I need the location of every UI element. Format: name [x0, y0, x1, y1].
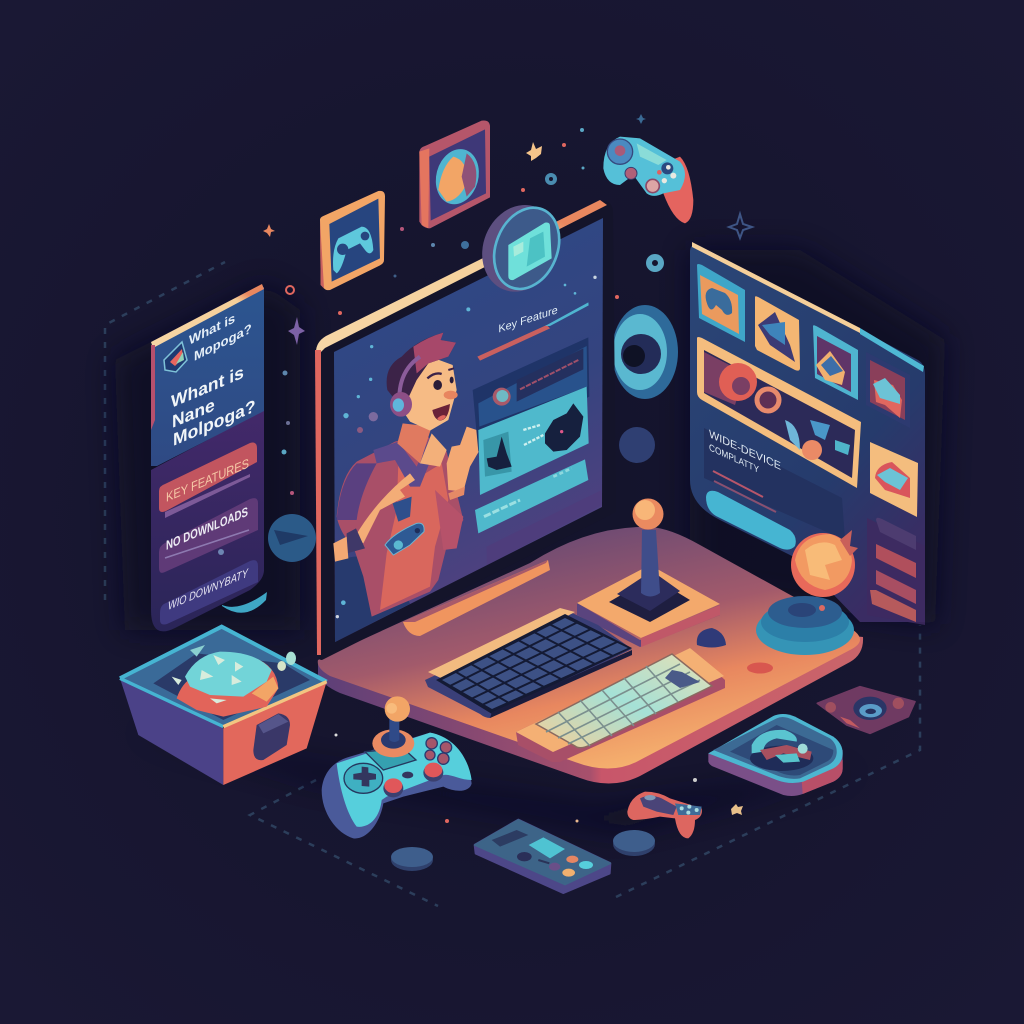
pointing hand and arm — [355, 473, 415, 543]
key smudge — [665, 670, 700, 688]
monitor top rim — [316, 200, 607, 352]
tray base — [708, 750, 843, 796]
wave accent — [222, 592, 267, 613]
floating icon: controller tile — [320, 191, 385, 290]
box right side — [223, 682, 327, 785]
cyan button — [706, 491, 796, 550]
speaker eye — [612, 305, 678, 399]
joystick plate — [577, 603, 720, 647]
text: small heading line 2: Mopoga? — [194, 321, 252, 364]
box rim — [120, 627, 327, 682]
joystick ball — [385, 696, 410, 722]
joystick stick — [641, 530, 660, 596]
floating controller top right — [603, 137, 693, 223]
screen sparks — [336, 276, 597, 618]
red thumb button left — [383, 779, 403, 797]
controller red grip — [663, 157, 693, 223]
button: community — [160, 560, 258, 624]
hair — [387, 333, 456, 400]
shirt body — [337, 433, 463, 617]
treasure box — [120, 627, 327, 785]
small ring ornaments — [286, 175, 661, 294]
tray ring — [750, 746, 813, 771]
character — [333, 333, 482, 617]
UI panel: game card — [478, 387, 589, 495]
round tray — [708, 714, 843, 796]
text block: wide-device — [704, 428, 845, 540]
raised hand — [447, 427, 482, 492]
tile: controller — [697, 264, 745, 342]
dark keyboard — [425, 608, 632, 718]
screen content in zoom coords — [333, 276, 602, 618]
lower panel body — [151, 410, 264, 631]
UI panel: action bar — [475, 459, 588, 533]
text block: wide-device: COMPLATTY — [709, 442, 759, 476]
monitor stand — [403, 560, 550, 636]
button: community: WIO DOWNYBATY — [168, 566, 249, 613]
tray top — [708, 714, 843, 783]
controller top plate — [637, 143, 667, 165]
joystick ball — [632, 498, 664, 530]
tile: abstract orange — [755, 296, 800, 371]
monitor stand top — [403, 560, 548, 622]
monitor left edge — [315, 350, 321, 655]
text block: wide-device: WIDE-DEVICE — [709, 428, 781, 473]
nose — [444, 391, 458, 399]
joystick ring — [372, 729, 414, 757]
tag icon — [393, 497, 412, 522]
front controller — [322, 696, 472, 838]
soft dark haze behind scene — [115, 250, 945, 830]
ear cup — [390, 392, 412, 417]
text: main heading line 2: Nane — [172, 394, 215, 432]
d-pad — [353, 767, 376, 787]
small disc right — [613, 830, 655, 856]
monitor screen — [334, 218, 603, 642]
controller top — [337, 733, 472, 827]
box latch — [253, 713, 290, 760]
eye — [433, 380, 442, 390]
right panel body — [690, 245, 925, 622]
small controller — [627, 792, 702, 838]
text: main heading line 3: Molpoga? — [173, 395, 256, 450]
small orb — [619, 427, 655, 463]
treasure pile — [177, 655, 278, 717]
floating icon: game art tile — [419, 120, 490, 228]
button: key features — [159, 443, 257, 518]
remote handset — [475, 820, 610, 893]
face — [397, 357, 457, 431]
left ornament orb — [268, 514, 316, 562]
mouth — [432, 404, 450, 421]
screen dark wave lower left — [335, 556, 410, 642]
floating icon: orb screen — [469, 193, 571, 303]
desk top surface — [318, 527, 860, 769]
hoodie sleeve dark — [337, 463, 377, 520]
red thumb button right — [423, 764, 443, 782]
text: small heading: What is — [189, 310, 235, 348]
text: main heading line 1: Whant is — [171, 361, 244, 412]
tile: controller orange — [870, 442, 918, 517]
tile: large game art — [697, 337, 861, 488]
headphone band — [399, 357, 420, 397]
desk pebbles — [697, 628, 773, 674]
heading underline bars — [477, 325, 550, 361]
brows — [427, 373, 442, 378]
joystick on desk — [577, 498, 720, 647]
tile: controller purple — [866, 352, 910, 428]
light keys — [536, 654, 712, 748]
box opening — [120, 627, 327, 727]
isometric floor dashed outline — [105, 262, 920, 906]
face buttons — [426, 738, 437, 749]
right panel top rim — [692, 242, 862, 334]
tile: box — [813, 325, 858, 400]
icon: logo badge — [164, 342, 187, 372]
shirt highlight — [380, 463, 448, 610]
panel: wide-device compatibility — [690, 242, 925, 625]
stars and sparks — [263, 114, 752, 823]
controller body — [603, 137, 685, 196]
monitor — [315, 200, 616, 660]
light keyboard tray — [516, 648, 725, 762]
controller body — [322, 733, 472, 838]
wrist band — [448, 487, 465, 500]
joystick stem — [389, 715, 399, 742]
button: no downloads — [159, 498, 258, 573]
centre plate — [365, 748, 416, 770]
blue dome — [756, 596, 854, 655]
blue header card — [151, 287, 264, 466]
game card — [817, 687, 915, 733]
left stick — [607, 139, 633, 164]
box inner shade — [153, 653, 310, 720]
lower stick — [625, 167, 637, 179]
right menu list — [867, 518, 925, 625]
panel: what is Mopoga — [151, 284, 267, 631]
face buttons — [661, 162, 673, 174]
small disc left — [391, 847, 433, 871]
small select — [402, 772, 413, 778]
tray inner — [713, 717, 837, 779]
orange fireball — [791, 530, 858, 597]
neck — [397, 423, 432, 463]
desk — [318, 527, 863, 784]
UI panel: profile row — [473, 337, 589, 452]
purple lower right region — [487, 490, 602, 565]
light keyboard — [516, 648, 725, 762]
joystick base — [609, 577, 690, 622]
button: key features: KEY FEATURES — [166, 456, 249, 505]
header card rim — [151, 284, 264, 348]
star ornament — [526, 142, 542, 161]
shirt controller print — [385, 523, 424, 555]
button: no downloads: NO DOWNLOADS — [166, 504, 248, 553]
collar — [373, 437, 433, 487]
desk front edge — [318, 600, 863, 784]
monitor bezel — [316, 201, 616, 660]
d-pad well — [344, 763, 383, 793]
box left side — [120, 678, 223, 785]
text: key feature heading: Key Feature — [498, 304, 558, 336]
